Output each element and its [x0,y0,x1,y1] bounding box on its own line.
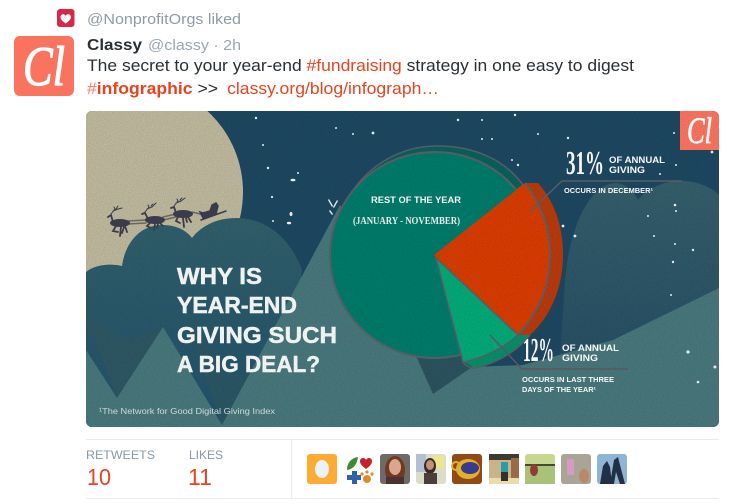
callout: 31 percent in December: 31% [566,145,604,182]
heading: GIVING SUCH [177,322,337,348]
heading: YEAR-END [177,292,297,318]
callout: 31 percent in December: OCCURS IN DECEMBER¹ [564,188,654,195]
stat: retweets: RETWEETS [86,448,155,462]
pie slice: last three days 12 percent [436,258,518,362]
stat: retweets: 10 [87,464,111,490]
stat: retweets [86,448,155,490]
stars [255,114,717,383]
callout: 31 percent in December [529,145,682,212]
pie chart [330,146,563,368]
heading: WHY IS [177,263,262,289]
cloud left [86,218,302,440]
pie rim: December [518,183,563,335]
liked by text: @NonprofitOrgs liked [87,11,241,28]
reindeer three [171,198,193,227]
tweet text: #infographic >> classy.org/blog/infograph… [87,79,439,98]
heading [177,263,337,377]
sleigh [200,203,226,220]
callout: 12 percent in last three days: OCCURS IN LAST THREE [522,377,614,384]
pie slice: rest of the year [330,152,540,358]
stat: likes: LIKES [189,448,223,462]
tweet text: The secret to your year-end #fundraising strategy in one easy to digest [87,56,634,75]
callout: 12 percent in last three days [490,332,628,394]
tweet author line: @classy · 2h [148,37,241,54]
stat: likes: 11 [188,464,212,490]
callout: 31 percent in December: GIVING [609,165,645,175]
callout: 12 percent in last three days: 12% [523,332,554,369]
callout: 12 percent in last three days: OF ANNUAL [562,343,620,353]
avatar: Classy logo: Cl [23,36,65,98]
reins [128,212,200,224]
stat: likes [188,448,223,490]
pie slice: December 31 percent [434,183,550,335]
pie back rim [351,145,524,192]
avatar: egg [307,454,337,484]
pie rim: last three days [464,335,530,368]
tweet author line [87,37,241,54]
footnote: ¹The Network for Good Digital Giving Index [99,406,276,416]
liked header [57,9,241,28]
moon [86,111,243,272]
pie label: date range: (JANUARY - NOVEMBER) [353,215,460,227]
callout: 12 percent in last three days: GIVING [562,353,598,363]
mountains [86,205,719,427]
logo badge: Cl [687,111,712,152]
dark triangle under pie [417,356,472,394]
avatar: grey scene [561,454,591,484]
callout: 12 percent in last three days: DAYS OF THE YEAR¹ [522,387,597,394]
avatar: green landscape [525,454,555,484]
avatar: charity icons [347,457,374,484]
panel: infographic image [86,111,719,427]
icon: heart badge [57,9,74,27]
avatar: woman with red hair [380,454,410,484]
avatars row [307,454,627,484]
cloud top right [560,181,719,360]
reindeer one [108,206,130,236]
callout: 31 percent in December: OF ANNUAL [609,155,666,165]
avatar: person outdoors [489,454,519,484]
tweet author line: Classy [87,37,142,54]
lower dark shade [86,319,142,396]
pie label: rest of the year: REST OF THE YEAR [371,195,462,205]
avatar: coffee cup [452,454,482,484]
avatar: penguins [597,454,627,484]
heading: A BIG DEAL? [177,351,320,377]
tweet text [87,56,634,98]
avatar: woman in classroom [416,454,446,484]
icon: reindeer and sleigh silhouette [108,198,226,236]
reindeer two [142,203,165,230]
